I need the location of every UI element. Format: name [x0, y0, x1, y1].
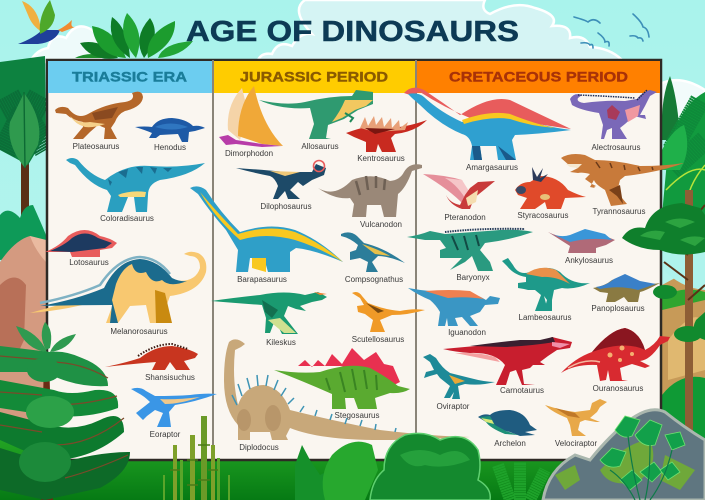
- dinosaur: Amargasaurus: [404, 88, 571, 172]
- icon: right palms: [662, 76, 705, 215]
- icon: round bush: [370, 433, 490, 500]
- dinosaur: Stegosaurus: Stegosaurus: [335, 411, 379, 420]
- panel: Triassic era: [30, 61, 217, 439]
- dinosaur: Panoplosaurus: Panoplosaurus: [591, 304, 645, 313]
- dinosaur: Shansisuchus: Shansisuchus: [145, 373, 195, 382]
- dinosaur: Kentrosaurus: Kentrosaurus: [357, 154, 405, 163]
- dinosaur: Baryonyx: Baryonyx: [456, 273, 490, 282]
- icon: mossy rock with ginkgo: [543, 410, 705, 500]
- grass ground: [0, 415, 705, 500]
- dinosaur: Panoplosaurus: [591, 274, 660, 313]
- dinosaur: Iguanodon: [408, 288, 500, 337]
- dinosaur: Scutellosaurus: Scutellosaurus: [352, 335, 404, 344]
- icon: right cliff and tree: [650, 190, 705, 440]
- dinosaur: Plateosaurus: [55, 92, 143, 151]
- dinosaur: Coloradisaurus: [66, 158, 205, 223]
- dinosaur: Lotosaurus: [45, 230, 117, 267]
- dinosaur: Kileskus: [211, 292, 327, 347]
- dinosaur: Lambeosaurus: [502, 258, 590, 322]
- dinosaur: Styracosaurus: [515, 167, 586, 220]
- dinosaur: Baryonyx: [407, 229, 533, 282]
- dinosaur: Tyrannosaurus: Tyrannosaurus: [593, 207, 645, 216]
- dinosaur: Carnotaurus: [443, 337, 572, 395]
- dinosaur: Ankylosaurus: [548, 229, 615, 265]
- icon: birds: [574, 14, 649, 48]
- panel: Jurassic period: [190, 61, 470, 452]
- dinosaur: Oviraptor: Oviraptor: [437, 402, 470, 411]
- dinosaur: Velociraptor: Velociraptor: [555, 439, 597, 448]
- icon: fern bottom: [498, 462, 545, 500]
- header: Triassic: TRIASSIC ERA: [72, 68, 187, 84]
- header: Triassic: [48, 61, 212, 93]
- dinosaur: Henodus: Henodus: [154, 143, 186, 152]
- dinosaur: Eoraptor: Eoraptor: [150, 430, 181, 439]
- header: Jurassic: JURASSIC PERIOD: [240, 68, 388, 84]
- dinosaur: Pteranodon: Pteranodon: [444, 213, 486, 222]
- dinosaur: Oviraptor: [423, 354, 495, 411]
- dinosaur: Pteranodon: [423, 174, 495, 222]
- dinosaur: Lambeosaurus: Lambeosaurus: [519, 313, 571, 322]
- icon: foreground fern tree: [0, 322, 130, 500]
- icon: left palm tree: [0, 56, 46, 217]
- dinosaur: Eoraptor: [131, 388, 217, 439]
- dinosaur: Allosaurus: [259, 90, 373, 151]
- dinosaur: Amargasaurus: Amargasaurus: [466, 163, 518, 172]
- dinosaur: Ankylosaurus: Ankylosaurus: [565, 256, 613, 265]
- icon: top leaf plant: [75, 13, 193, 59]
- dinosaur: Dimorphodon: Dimorphodon: [225, 149, 273, 158]
- dinosaur: Kentrosaurus: [346, 116, 427, 163]
- dinosaur: Vulcanodon: Vulcanodon: [360, 220, 402, 229]
- dinosaur: Compsognathus: Compsognathus: [345, 275, 403, 284]
- clouds: [30, 0, 705, 130]
- icon: left bush: [0, 205, 46, 260]
- dinosaur: Allosaurus: Allosaurus: [301, 142, 339, 151]
- dinosaur: Dilophosaurus: Dilophosaurus: [260, 202, 312, 211]
- dinosaur: Henodus: [135, 118, 205, 152]
- dinosaur: Alectrosaurus: Alectrosaurus: [592, 143, 640, 152]
- icon: bamboo shoots: [163, 416, 230, 500]
- dinosaur: Plateosaurus: Plateosaurus: [73, 142, 119, 151]
- dinosaur: Styracosaurus: Styracosaurus: [517, 211, 569, 220]
- dinosaur: Barapasaurus: Barapasaurus: [237, 275, 287, 284]
- panel: Cretaceous period: [404, 61, 684, 448]
- dinosaur: Diplodocus: Diplodocus: [239, 443, 279, 452]
- dinosaur: Ouranosaurus: Ouranosaurus: [593, 384, 643, 393]
- dinosaur: Dilophosaurus: [236, 160, 326, 211]
- dinosaur: Vulcanodon: [318, 164, 422, 229]
- dinosaur: Diplodocus: [224, 339, 470, 452]
- dinosaur: Archelon: [478, 410, 537, 448]
- dinosaur: Alectrosaurus: [570, 90, 657, 152]
- dinosaur: Melanorosaurus: Melanorosaurus: [110, 327, 168, 336]
- dinosaur: Archelon: Archelon: [494, 439, 526, 448]
- dinosaur: Scutellosaurus: [352, 292, 425, 344]
- dinosaur: Coloradisaurus: Coloradisaurus: [100, 214, 154, 223]
- dinosaur: Iguanodon: Iguanodon: [448, 328, 486, 337]
- header: Jurassic: [214, 61, 415, 93]
- panel: chart board: [47, 60, 661, 460]
- icon: monstera leaves: [295, 442, 378, 500]
- header: Cretaceous: [417, 61, 660, 93]
- dinosaur: Melanorosaurus: [30, 252, 206, 336]
- icon: right foreground bush tree: [622, 203, 705, 342]
- dinosaur: Ouranosaurus: [561, 328, 670, 393]
- icon: flying pterosaur: [18, 0, 75, 44]
- dinosaur: Dimorphodon: [219, 86, 283, 158]
- dinosaur: Stegosaurus: [274, 348, 410, 420]
- header: Cretaceous: CRETACEOUS PERIOD: [449, 68, 628, 84]
- icon: rock cliff left: [0, 236, 46, 420]
- dinosaur: Velociraptor: [545, 399, 607, 448]
- dinosaur: Carnotaurus: Carnotaurus: [500, 386, 544, 395]
- dinosaur: Kileskus: Kileskus: [266, 338, 296, 347]
- dinosaur: Compsognathus: [341, 232, 405, 284]
- dinosaur: Lotosaurus: Lotosaurus: [69, 258, 109, 267]
- dinosaur: Barapasaurus: [190, 186, 343, 284]
- title: AGE OF DINOSAURS: [186, 16, 519, 48]
- dinosaur: Tyrannosaurus: [561, 154, 684, 216]
- dinosaur: Shansisuchus: [105, 344, 198, 382]
